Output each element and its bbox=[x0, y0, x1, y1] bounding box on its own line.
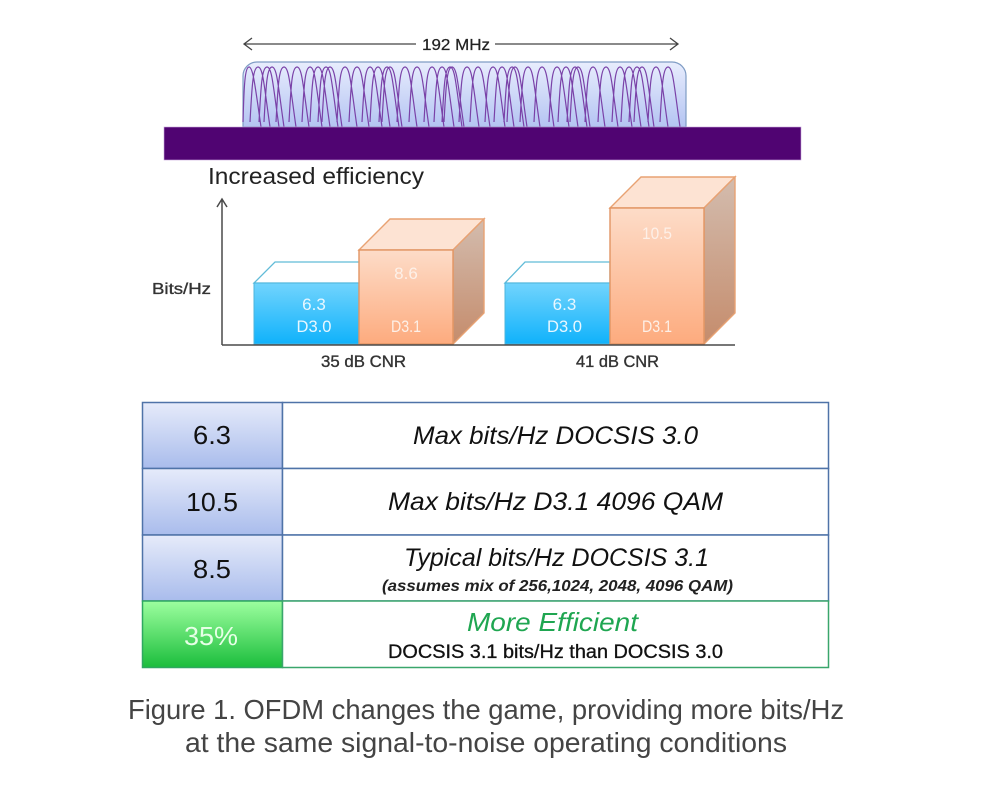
D3.1 orange bar bbox=[610, 177, 735, 344]
row: more efficient: DOCSIS 3.1 bits/Hz than DOCSIS 3.0 bbox=[388, 642, 723, 663]
row: more efficient: 35% bbox=[184, 621, 238, 651]
bar chart: bits per Hz at two CNR levels bbox=[152, 177, 735, 371]
OFDM band background bbox=[243, 62, 686, 127]
row: max D3.1: 10.5 bbox=[186, 487, 238, 517]
D3.1 orange bar: D3.1 bbox=[391, 317, 421, 336]
row: typical D3.1 bbox=[142, 535, 828, 601]
D3.0 blue bar: 6.3 bbox=[302, 295, 326, 314]
OFDM subcarrier waves bbox=[243, 67, 680, 127]
row: max D3.1 bbox=[142, 468, 828, 535]
D3.0 blue bar: D3.0 bbox=[296, 317, 332, 336]
row: typical D3.1: Typical bits/Hz DOCSIS 3.1 bbox=[404, 544, 709, 572]
figure caption: at the same signal-to-noise operating conditions bbox=[185, 727, 787, 758]
D3.0 blue bar: 6.3 bbox=[553, 295, 576, 314]
D3.0 blue bar bbox=[505, 262, 610, 344]
heading: Increased efficiency: Increased efficiency bbox=[208, 163, 425, 189]
192 MHz bandwidth arrow bbox=[244, 38, 678, 50]
row: max D3.0 bbox=[142, 402, 828, 468]
bandwidth label: 192 MHz bbox=[422, 37, 490, 54]
y axis label: Bits/Hz bbox=[152, 281, 211, 298]
figure caption: Figure 1. OFDM changes the game, providing more bits/Hz bbox=[128, 694, 844, 725]
D3.1 orange bar bbox=[359, 219, 484, 344]
group: 41 dB CNR bbox=[505, 177, 735, 344]
panel: spectrum diagram bbox=[164, 37, 801, 160]
x label: 35 dB CNR: 35 dB CNR bbox=[321, 353, 406, 371]
row: typical D3.1: 8.5 bbox=[193, 554, 231, 584]
figure caption bbox=[128, 694, 844, 758]
group: 35 dB CNR bbox=[254, 219, 484, 344]
D3.1 orange bar: D3.1 bbox=[642, 317, 672, 336]
table: efficiency comparison bbox=[142, 402, 828, 668]
D3.0 blue bar: D3.0 bbox=[547, 317, 582, 336]
chart axes bbox=[217, 199, 735, 345]
D3.1 orange bar: 10.5 bbox=[642, 224, 672, 243]
x label: 41 dB CNR: 41 dB CNR bbox=[576, 353, 659, 371]
row: max D3.0: 6.3 bbox=[193, 420, 231, 450]
row: more efficient bbox=[142, 601, 828, 668]
D3.0 blue bar bbox=[254, 262, 360, 344]
row: typical D3.1: (assumes mix of 256,1024, 2048, 4096 QAM) bbox=[382, 578, 733, 595]
D3.1 orange bar: 8.6 bbox=[394, 264, 418, 283]
row: more efficient: More Efficient bbox=[467, 607, 640, 637]
purple base bar bbox=[164, 127, 801, 160]
row: max D3.1: Max bits/Hz D3.1 4096 QAM bbox=[388, 488, 723, 516]
row: max D3.0: Max bits/Hz DOCSIS 3.0 bbox=[413, 422, 698, 450]
